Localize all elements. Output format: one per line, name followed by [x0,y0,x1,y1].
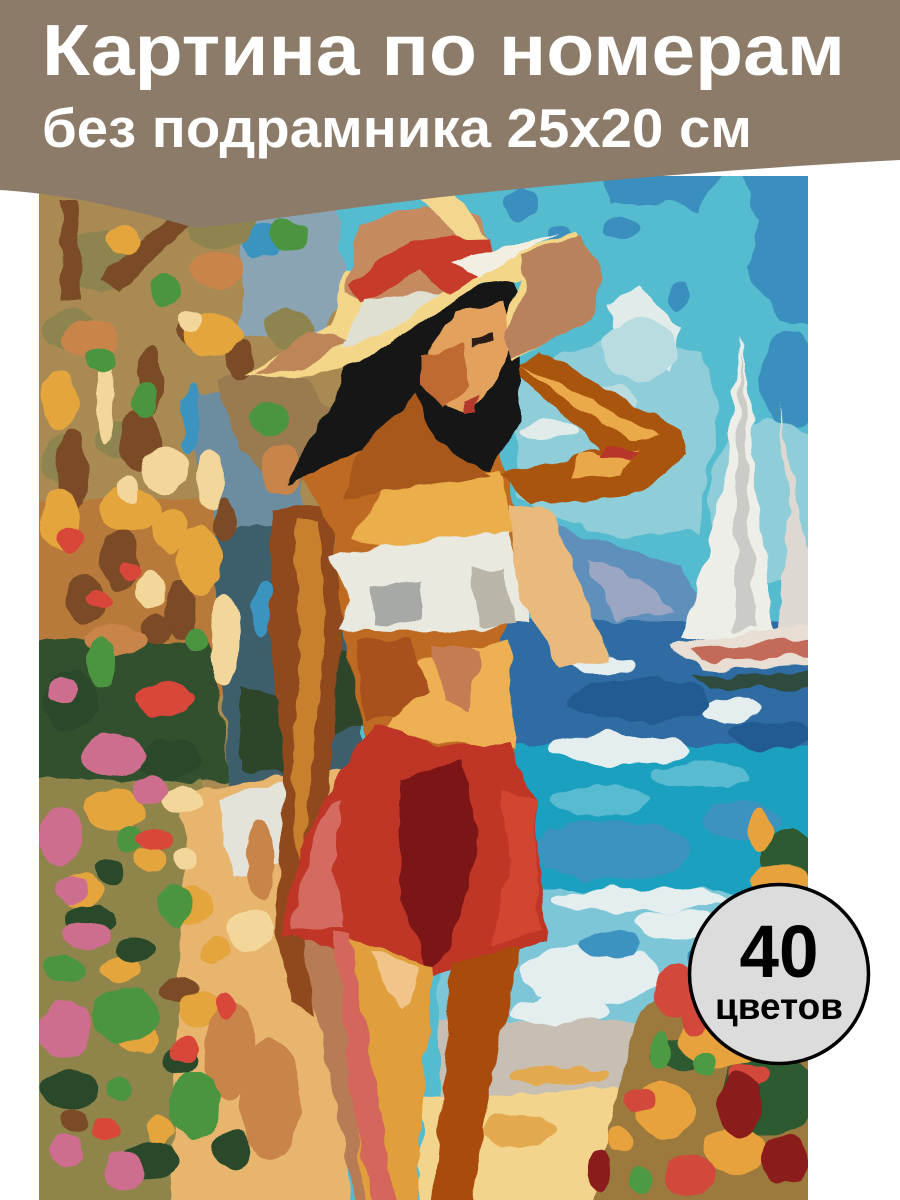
raised arm [500,350,686,505]
top banner [0,0,900,228]
badge: 40 colours [690,884,868,1064]
painting [20,160,830,1200]
hair [285,275,522,485]
shorts [282,725,546,975]
foliage paint dabs [38,192,316,1188]
chest [345,395,490,500]
subtitle: без подрамника 25х20 см [42,97,752,159]
white top [330,530,528,632]
far arm [270,505,345,1020]
torso [302,450,515,755]
legs [335,935,435,1200]
cliff light edge [510,505,610,665]
foreground flowers [588,810,830,1200]
title: Картина по номерам [42,11,845,91]
face [420,300,510,412]
sky and sea background [333,176,808,1200]
badge number: 40 [740,910,818,993]
badge label: цветов [715,986,843,1027]
left foliage [20,170,365,1200]
mountains [558,525,697,624]
sea [490,620,830,750]
hat [245,230,600,378]
woman [245,195,686,1200]
sailboat [682,335,775,640]
